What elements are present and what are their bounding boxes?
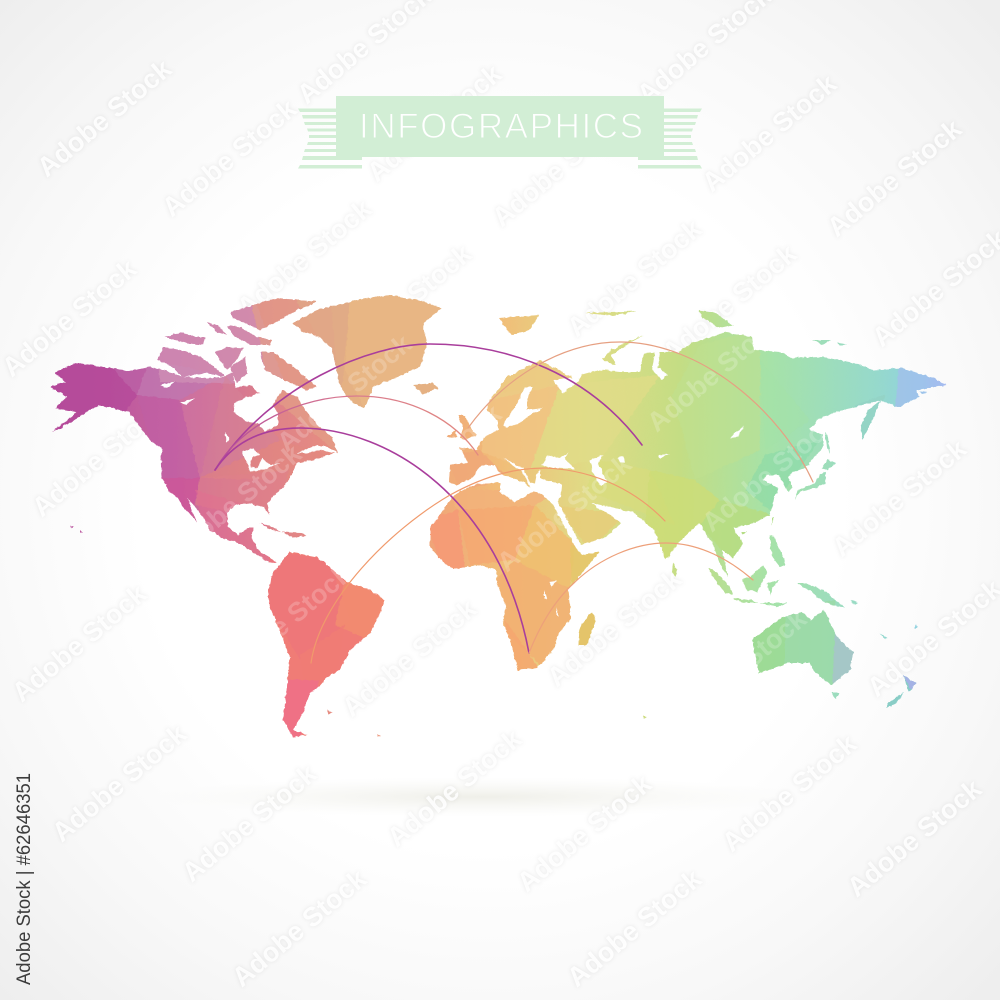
lakes and inland seas <box>160 352 744 617</box>
banner left ribbon tail <box>298 108 362 168</box>
arc: southern africa to borneo <box>529 543 753 653</box>
africa <box>430 483 599 670</box>
south america <box>268 552 385 737</box>
banner right ribbon tail <box>638 108 702 168</box>
stock watermarks on background: Adobe Stock <box>541 563 688 693</box>
stock watermarks over land: Adobe Stock <box>491 448 638 578</box>
stock watermarks over land: Adobe Stock <box>361 398 508 528</box>
arctic canada islands <box>157 298 317 390</box>
arc: north america to western europe <box>215 396 478 470</box>
stock watermarks over land: Adobe Stock <box>271 328 418 458</box>
stock watermarks over land: Adobe Stock <box>666 603 813 733</box>
title banner <box>298 96 702 168</box>
banner main panel <box>336 96 664 157</box>
arc: north america to central asia <box>215 344 642 470</box>
stock watermarks on background: Adobe Stock <box>0 253 143 383</box>
stock watermarks on background: Adobe Stock <box>821 113 968 243</box>
stock watermarks on background: Adobe Stock <box>336 593 483 723</box>
stock id caption: Adobe Stock | #62646351 <box>14 773 35 985</box>
title: INFOGRAPHICS <box>359 107 643 146</box>
stock watermarks on background: Adobe Stock <box>656 238 803 368</box>
stock watermarks on background: Adobe Stock <box>26 393 173 523</box>
stock watermarks over land <box>161 308 843 733</box>
stock watermarks on background: Adobe Stock <box>331 238 478 368</box>
polygon facets <box>40 285 950 740</box>
arc: north america to southern africa <box>215 428 529 653</box>
stock watermarks on background: Adobe Stock <box>561 213 708 343</box>
stock watermarks on background: Adobe Stock <box>156 93 303 223</box>
stock watermarks on background: Adobe Stock <box>841 773 988 903</box>
world map <box>40 285 950 740</box>
eurasia <box>447 332 947 577</box>
stock watermarks over land: Adobe Stock <box>211 558 358 688</box>
stock watermarks on background: Adobe Stock <box>226 863 373 993</box>
arc: south america to india <box>311 468 665 663</box>
stock watermarks over land: Adobe Stock <box>696 408 843 538</box>
stock watermarks on background: Adobe Stock <box>826 433 973 563</box>
stock watermarks on background: Adobe Stock <box>361 58 508 188</box>
stock watermarks on background: Adobe Stock <box>511 768 658 898</box>
greenland and iceland <box>293 295 442 408</box>
stock watermarks on background: Adobe Stock <box>176 758 323 888</box>
arctic and small islands <box>70 310 927 737</box>
stock watermarks on background: Adobe Stock <box>381 723 528 853</box>
arc: britain to japan <box>468 342 813 482</box>
stock watermarks on background: Adobe Stock <box>486 103 633 233</box>
stock watermarks over land: Adobe Stock <box>161 438 308 568</box>
oceania and southeast asia <box>708 535 918 708</box>
stock watermarks on background: Adobe Stock <box>31 53 178 183</box>
floor shadow <box>150 777 810 817</box>
stock watermarks over land: Adobe Stock <box>641 308 788 438</box>
north america <box>50 363 338 563</box>
stock watermarks on background: Adobe Stock <box>561 863 708 993</box>
stock watermarks on background: Adobe Stock <box>231 193 378 323</box>
stock watermarks on background: Adobe Stock <box>46 718 193 848</box>
stock watermarks on background: Adobe Stock <box>6 578 153 708</box>
stock watermarks on background: Adobe Stock <box>716 728 863 858</box>
stock watermarks on background: Adobe Stock <box>696 68 843 198</box>
route arcs <box>215 342 813 663</box>
